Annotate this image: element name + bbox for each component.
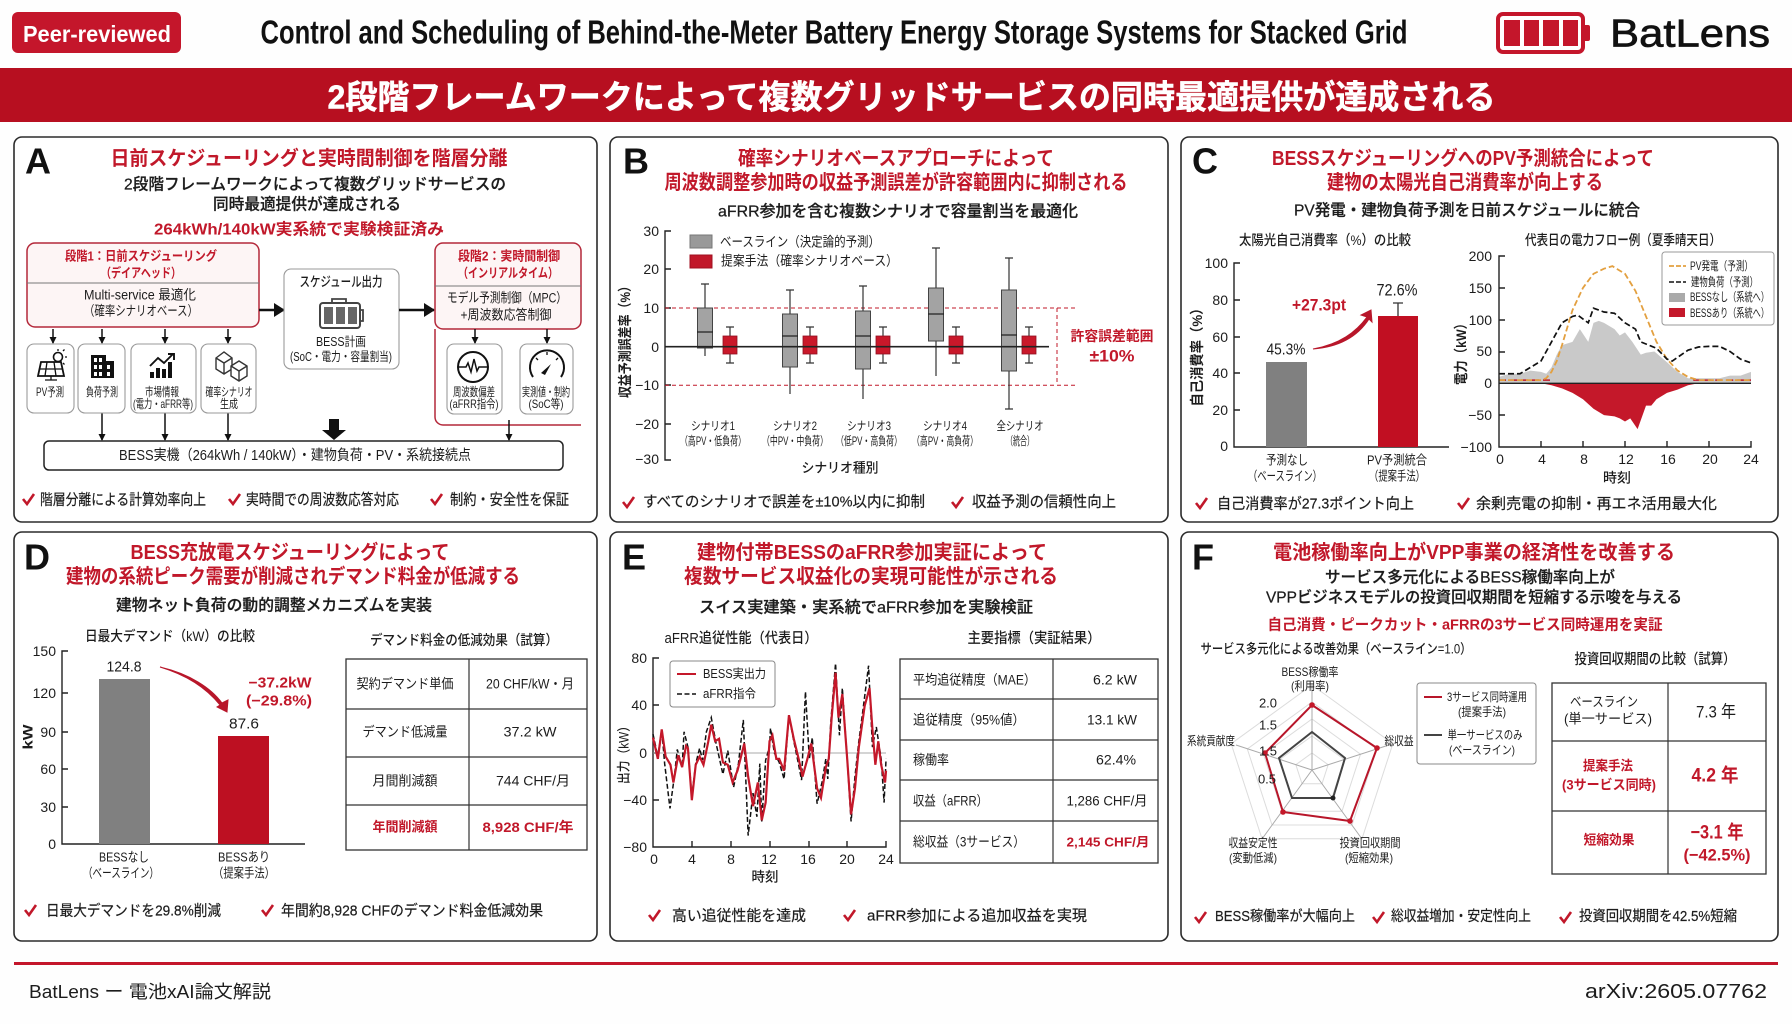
stage 1 box: （デイアヘッド） (101, 266, 181, 280)
bar chart: demand: 日最大デマンド（kW）の比較 (85, 628, 255, 644)
table: key metrics: 平均追従精度（MAE） (913, 672, 1036, 688)
legend C: PV発電（予測） (1690, 259, 1753, 273)
table: key metrics: 総収益（3サービス） (913, 834, 1025, 850)
checks E: 高い追従性能を達成 (672, 908, 806, 924)
bar chart: self consumption: 40 (1212, 365, 1228, 381)
table: payback: (3サービス同時) (1562, 776, 1656, 792)
stage 2 box: （インリアルタイム） (458, 266, 558, 280)
panel letter F: F (1192, 536, 1214, 578)
bar chart: self consumption: 0 (1220, 438, 1228, 454)
subtitle D: 建物ネット負荷の動的調整メカニズムを実装 (116, 596, 432, 614)
checks B: すべてのシナリオで誤差を±10%以内に抑制 (643, 494, 925, 510)
legend B: ベースライン（決定論的予測） (720, 234, 880, 250)
BESS actual bar (44, 441, 563, 470)
table: payback: 短縮効果 (1584, 832, 1635, 848)
subtitle A: 2段階フレームワークによって複数グリッドサービスの (124, 176, 506, 194)
bar chart: demand: BESSなし (99, 850, 149, 864)
table: key metrics: 2,145 CHF/月 (1066, 834, 1150, 850)
scenario labels: シナリオ2 (773, 419, 817, 433)
area chart: power flow: 0 (1496, 451, 1504, 467)
radar chart: 1.5 (1259, 718, 1277, 732)
checks A: 階層分離による計算効率向上 (40, 490, 206, 508)
panel: A (14, 137, 597, 522)
checks D: 年間約8,928 CHFのデマンド料金低減効果 (281, 902, 543, 920)
table: key metrics: 追従精度（95%値） (913, 712, 1025, 728)
stage 1 box: Multi-service 最適化 (84, 288, 196, 302)
area chart: power flow: −100 (1460, 439, 1492, 455)
radar chart: 収益安定性 (1228, 836, 1278, 850)
footer rule (14, 962, 1778, 965)
table: key metrics: 13.1 kW (1087, 712, 1137, 728)
bar chart: self consumption: 100 (1205, 255, 1228, 271)
line chart: aFRR tracking: −40 (623, 792, 647, 808)
scenario labels: （低PV・高負荷） (836, 434, 902, 448)
bar chart: self consumption: +27.3pt (1292, 296, 1346, 314)
legend C: 建物負荷（予測） (1691, 275, 1758, 289)
table: demand charge: 契約デマンド単価 (356, 676, 454, 692)
card: frequency: 周波数偏差 (453, 384, 495, 399)
bar chart: demand: （ベースライン） (83, 866, 159, 880)
banner headline: 2段階フレームワークによって複数グリッドサービスの同時最適提供が達成される (328, 78, 1496, 116)
stage 1 box: 段階1：日前スケジューリング (65, 248, 217, 264)
checks D: 日最大デマンドを29.8%削減 (46, 902, 221, 920)
line chart: aFRR tracking: 時刻 (752, 870, 778, 884)
area chart: power flow: 20 (1702, 451, 1718, 467)
table: payback (1552, 650, 1766, 874)
scenario labels: （高PV・高負荷） (912, 434, 978, 448)
heading F: 電池稼働率向上がVPP事業の経済性を改善する (1273, 540, 1675, 564)
heading B: 周波数調整参加時の収益予測誤差が許容範囲内に抑制される (664, 170, 1128, 194)
table: payback: −3.1 年 (1690, 820, 1744, 844)
scenario labels: シナリオ1 (691, 419, 735, 433)
bar chart: demand: 120 (33, 685, 56, 701)
radar chart: 系統貢献度 (1187, 734, 1235, 748)
y axis label: 収益予測誤差率（%） (617, 280, 633, 398)
bar chart: self consumption: 太陽光自己消費率（%）の比較 (1239, 232, 1411, 248)
bar chart: self consumption: 自己消費率（%） (1189, 302, 1205, 406)
checks B: 収益予測の信頼性向上 (972, 494, 1116, 510)
card: scenario generation: 確率シナリオ (206, 384, 252, 399)
card: measurement (520, 344, 573, 414)
line chart: aFRR tracking: 24 (878, 851, 894, 867)
panel letter C: C (1192, 140, 1218, 182)
bar chart: demand: BESSあり (218, 850, 270, 864)
table: key metrics: 収益（aFRR） (913, 794, 988, 808)
table: demand charge (346, 632, 587, 850)
table: payback: 7.3 年 (1696, 702, 1736, 722)
area chart: power flow: 4 (1538, 451, 1546, 467)
checks F: BESS稼働率が大幅向上 (1215, 908, 1355, 925)
line chart: aFRR tracking: 0 (650, 851, 658, 867)
title: Control and Scheduling of Behind-the-Meter Battery Energy Storage Systems for Stacked Grid (260, 14, 1408, 50)
card: scenario generation: 生成 (220, 397, 238, 411)
area chart: power flow: 0 (1484, 375, 1492, 391)
radar chart: 0.5 (1258, 772, 1276, 786)
table: demand charge: 8,928 CHF/年 (482, 819, 574, 835)
logo: BatLens battery (1498, 12, 1770, 56)
scenario labels: （統合） (1006, 434, 1034, 448)
schedule output box: スケジュール出力 (300, 274, 382, 290)
card: PV forecast: PV予測 (36, 385, 64, 399)
box plot: −10 (635, 377, 659, 393)
checks A: 制約・安全性を保証 (450, 492, 569, 508)
panel letter A: A (25, 140, 51, 182)
table: demand charge: 37.2 kW (504, 724, 557, 740)
big arrow down (322, 419, 346, 440)
line chart: aFRR tracking: 40 (631, 697, 647, 713)
table: key metrics: 主要指標（実証結果） (968, 630, 1100, 647)
checks C: 自己消費率が27.3ポイント向上 (1217, 496, 1414, 512)
validation note: 264kWh/140kW実系統で実験検証済み (154, 220, 444, 238)
area chart: power flow: 200 (1469, 248, 1492, 264)
table: demand charge: 年間削減額 (372, 818, 438, 834)
area chart: power flow: 150 (1469, 280, 1492, 296)
x axis label: シナリオ種別 (802, 460, 878, 476)
legend B: 提案手法（確率シナリオベース） (721, 254, 898, 268)
radar chart: (利用率) (1291, 679, 1329, 693)
radar chart: 1.5 (1259, 744, 1277, 758)
heading A: 日前スケジューリングと実時間制御を階層分離 (110, 146, 508, 170)
red note F: 自己消費・ピークカット・aFRRの3サービス同時運用を実証 (1268, 616, 1662, 634)
area chart: power flow: −50 (1468, 407, 1492, 423)
footer left: BatLens ー 電池xAI論文解説 (29, 982, 271, 1002)
card: PV forecast (27, 344, 74, 413)
radar chart: (変動低減) (1229, 850, 1277, 865)
heading C: 建物の太陽光自己消費率が向上する (1327, 170, 1603, 194)
line chart: aFRR tracking: 80 (631, 650, 647, 666)
card: market info: 市場情報 (145, 385, 179, 399)
area chart: power flow: 50 (1476, 343, 1492, 359)
heading C: BESSスケジューリングへのPV予測統合によって (1272, 146, 1654, 170)
area chart: power flow (1453, 232, 1774, 486)
bar chart: self consumption: （ベースライン） (1248, 468, 1322, 484)
legend E (670, 661, 775, 707)
arrow schedule to stage2 (399, 309, 434, 311)
scenario labels: シナリオ4 (923, 419, 967, 433)
badge: Peer-reviewed: Peer-reviewed (23, 21, 171, 47)
bar chart: demand: −37.2kW (248, 674, 312, 692)
arrow: reduction (160, 667, 228, 712)
bar chart: demand: kW (20, 724, 36, 750)
stage 2 box: 段階2：実時間制御 (458, 248, 560, 264)
table: payback: 投資回収期間の比較（試算） (1574, 650, 1736, 668)
legend F: (ベースライン) (1449, 743, 1515, 757)
table: demand charge: デマンド料金の低減効果（試算） (370, 632, 558, 648)
area chart: power flow: 24 (1743, 451, 1759, 467)
bar chart: self consumption: 20 (1212, 402, 1228, 418)
checks C (1196, 496, 1717, 512)
area chart: power flow: 100 (1469, 312, 1492, 328)
subtitle B: aFRR参加を含む複数シナリオで容量割当を最適化 (718, 202, 1078, 220)
line chart: aFRR tracking: 出力（kW） (616, 720, 632, 784)
panel: C (1181, 137, 1778, 522)
radar chart: サービス多元化による改善効果（ベースライン=1.0） (1200, 640, 1472, 656)
box plot: 0 (651, 339, 659, 355)
heading B: 確率シナリオベースアプローチによって (738, 147, 1054, 170)
area chart: power flow: 代表日の電力フロー例（夏季晴天日） (1525, 232, 1721, 248)
checks F: 投資回収期間を42.5%短縮 (1579, 908, 1737, 925)
table: payback: ベースライン (1570, 694, 1638, 710)
tolerance label: 許容誤差範囲 (1070, 328, 1154, 344)
tolerance label (1070, 328, 1154, 366)
line chart: aFRR tracking: aFRR追従性能（代表日） (664, 629, 818, 647)
panel: D (14, 532, 597, 941)
line chart: aFRR tracking: 0 (639, 745, 647, 761)
table: demand charge: 20 CHF/kW・月 (486, 676, 574, 692)
bar chart: demand: 87.6 (229, 716, 259, 732)
bar chart: demand: 124.8 (106, 658, 142, 676)
line chart: aFRR tracking (616, 629, 894, 884)
table: key metrics: 6.2 kW (1093, 672, 1137, 688)
panel letter B: B (623, 140, 649, 182)
card: scenario generation (201, 344, 256, 413)
schedule output box (284, 269, 399, 369)
radar chart: 2.0 (1259, 696, 1277, 710)
bar chart: demand: 60 (40, 761, 56, 777)
schedule output box: BESS計画 (316, 334, 366, 349)
checks D (25, 902, 543, 920)
scenario labels: （高PV・低負荷） (680, 434, 746, 448)
bar chart: demand: （提案手法） (213, 866, 275, 880)
bar chart: self consumption (1189, 232, 1449, 484)
panel letter E: E (622, 536, 646, 578)
checks F (1195, 908, 1737, 925)
box plot: −30 (635, 451, 659, 467)
table: demand charge: 月間削減額 (372, 772, 438, 788)
bar chart: demand (20, 628, 312, 880)
area chart: power flow: 電力（kW） (1453, 317, 1469, 385)
box plot: 30 (643, 223, 659, 239)
stage 1 box (27, 243, 259, 327)
subtitle C: PV発電・建物負荷予測を日前スケジュールに統合 (1294, 202, 1640, 220)
table: key metrics: 1,286 CHF/月 (1066, 794, 1148, 808)
icon: battery (320, 299, 363, 328)
card: market info: (電力・aFRR等) (133, 397, 193, 411)
checks E (649, 908, 1087, 924)
legend E: BESS実出力 (703, 666, 766, 681)
line chart: aFRR tracking: 12 (761, 851, 777, 867)
table: payback: 提案手法 (1583, 758, 1633, 774)
box plot: 10 (643, 300, 659, 316)
table: demand charge: デマンド低減量 (362, 724, 448, 740)
radar chart: BESS稼働率 (1282, 665, 1338, 679)
stage 1 box: （確率シナリオベース） (84, 304, 198, 318)
logo: BatLens battery: BatLens (1610, 12, 1770, 56)
tolerance label: ±10% (1090, 346, 1134, 366)
bar chart: self consumption: 予測なし (1266, 452, 1308, 468)
bar chart: self consumption: PV予測統合 (1367, 452, 1427, 468)
table: demand charge: 744 CHF/月 (496, 774, 570, 788)
heading E (684, 541, 1058, 588)
heading C (1272, 146, 1654, 194)
card: frequency (447, 344, 502, 414)
box plot (617, 223, 1154, 476)
area chart: power flow: 16 (1660, 451, 1676, 467)
BESS actual bar: BESS実機（264kWh / 140kW）・建物負荷・PV・系統接続点 (119, 447, 471, 464)
checks A (23, 490, 569, 508)
panel: E (610, 532, 1168, 941)
bar chart: demand: 150 (33, 643, 56, 659)
footer right: arXiv id: arXiv:2605.07762 (1585, 981, 1767, 1003)
line chart: aFRR tracking: −80 (623, 839, 647, 855)
bar chart: self consumption: 72.6% (1376, 280, 1418, 300)
bar chart: demand: 0 (48, 836, 56, 852)
legend F: (提案手法) (1458, 704, 1506, 719)
heading E: 建物付帯BESSのaFRR参加実証によって (697, 541, 1047, 564)
checks E: aFRR参加による追加収益を実現 (867, 908, 1087, 924)
panel letter D: D (24, 536, 50, 578)
legend C (1662, 252, 1774, 325)
stage 2 box: モデル予測制御（MPC） (447, 290, 567, 306)
card: market info (131, 344, 196, 413)
line chart: aFRR tracking: 4 (688, 851, 696, 867)
bar chart: demand: 30 (40, 799, 56, 815)
arrow stage1 to schedule (259, 309, 284, 311)
bar chart: demand: 90 (40, 724, 56, 740)
subtitle A (124, 176, 506, 214)
scenario labels (680, 419, 1044, 448)
area chart: power flow: 12 (1618, 451, 1634, 467)
bar chart: self consumption: 80 (1212, 292, 1228, 308)
checks B (623, 494, 1116, 510)
card: frequency: (aFRR指令) (450, 396, 498, 411)
legend B (690, 234, 898, 268)
card: load forecast: 負荷予測 (86, 385, 118, 399)
badge: Peer-reviewed (12, 12, 181, 53)
table: payback: (単一サービス) (1564, 712, 1652, 726)
checks A: 実時間での周波数応答対応 (246, 492, 399, 508)
legend F: 単一サービスのみ (1448, 728, 1522, 742)
radar chart: 投資回収期間 (1340, 835, 1400, 850)
legend F (1417, 683, 1536, 764)
heading B (664, 147, 1128, 194)
bar chart: self consumption: 45.3% (1266, 342, 1306, 358)
legend F: 3サービス同時運用 (1447, 690, 1527, 704)
stage 2 box: +周波数応答制御 (460, 306, 552, 322)
input arrows (53, 329, 547, 440)
box plot: 20 (643, 261, 659, 277)
table: payback: (−42.5%) (1684, 846, 1750, 864)
line chart: aFRR tracking: 8 (727, 851, 735, 867)
arrow: increase (1313, 310, 1372, 349)
table: key metrics (900, 630, 1158, 863)
scenario labels: 全シナリオ (996, 419, 1044, 433)
banner headline (0, 68, 1792, 122)
subtitle F: サービス多元化によるBESS稼働率向上が (1325, 568, 1615, 586)
bar chart: demand: (−29.8%) (246, 692, 312, 710)
table: payback: 4.2 年 (1692, 764, 1738, 786)
heading E: 複数サービス収益化の実現可能性が示される (684, 564, 1058, 588)
stage 2 box (435, 243, 581, 425)
checks F: 総収益増加・安定性向上 (1391, 908, 1531, 925)
scenario labels: （中PV・中負荷） (762, 433, 828, 448)
subtitle F (1266, 568, 1682, 606)
bar chart: self consumption: 60 (1212, 329, 1228, 345)
subtitle A: 同時最適提供が達成される (213, 194, 401, 214)
area chart: power flow: 8 (1580, 451, 1588, 467)
checks C: 余剰売電の抑制・再エネ活用最大化 (1476, 496, 1717, 512)
subtitle E: スイス実建築・実系統でaFRR参加を実験検証 (699, 598, 1033, 616)
panel: F (1181, 532, 1778, 941)
card: measurement: 実測値・制約 (522, 384, 570, 399)
scenario labels: シナリオ3 (847, 419, 891, 433)
schedule output box: (SoC・電力・容量割当) (290, 350, 392, 364)
radar chart: (短縮効果) (1345, 851, 1393, 865)
box plot: −20 (635, 416, 659, 432)
heading D (66, 540, 520, 588)
card: load forecast (78, 344, 125, 413)
bar chart: self consumption: （提案手法） (1369, 468, 1425, 484)
line chart: aFRR tracking: 16 (800, 851, 816, 867)
legend E: aFRR指令 (703, 686, 756, 701)
card: measurement: (SoC等) (528, 397, 564, 411)
heading D: 建物の系統ピーク需要が削減されデマンド料金が低減する (66, 564, 520, 588)
area chart: power flow: 時刻 (1603, 470, 1631, 486)
radar chart: 総収益 (1384, 733, 1414, 748)
table: key metrics: 稼働率 (913, 752, 949, 768)
heading D: BESS充放電スケジューリングによって (130, 540, 450, 564)
table: key metrics: 62.4% (1096, 752, 1136, 768)
line chart: aFRR tracking: 20 (839, 851, 855, 867)
panel: B (610, 137, 1168, 522)
radar chart (1187, 640, 1536, 865)
subtitle F: VPPビジネスモデルの投資回収期間を短縮する示唆を与える (1266, 588, 1682, 606)
